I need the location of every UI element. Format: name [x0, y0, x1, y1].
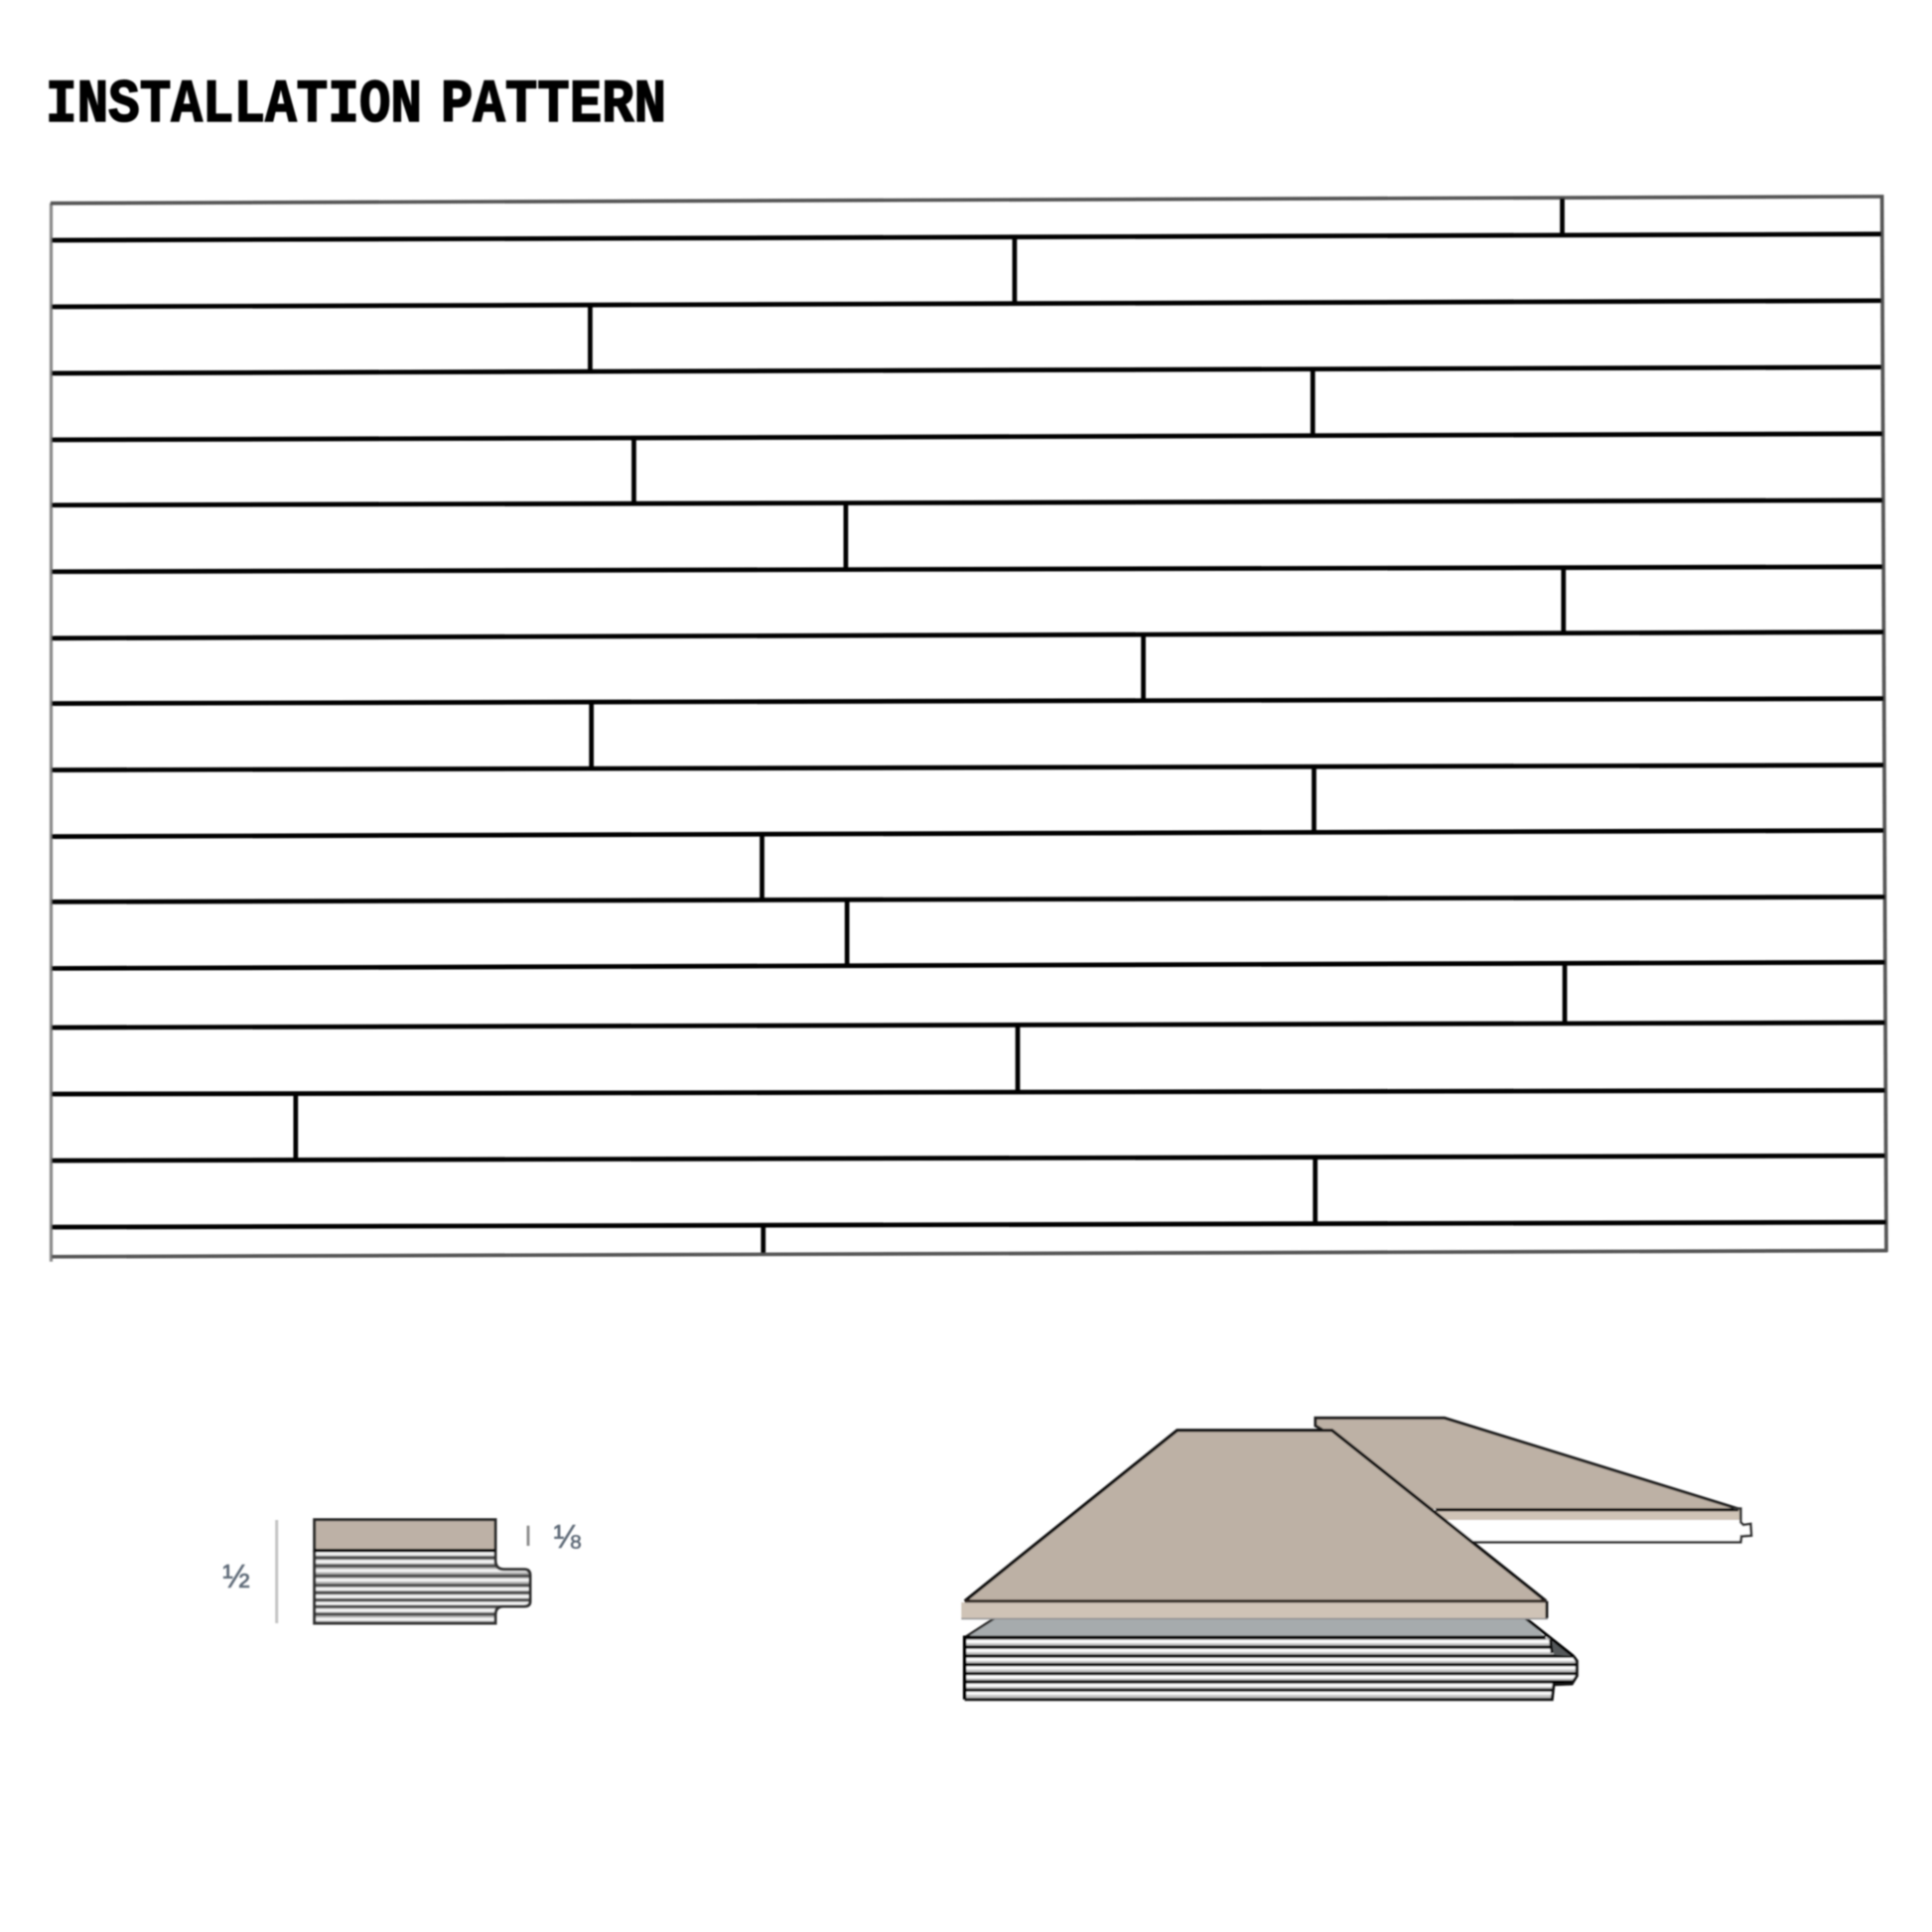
grey underlayer [965, 1618, 1546, 1637]
rear plank [1315, 1418, 1751, 1542]
dimension line: wear layer [527, 1526, 529, 1546]
dimension label: one half: ½ [222, 1558, 250, 1594]
title: INSTALLATION [46, 71, 422, 140]
core with tongue [314, 1551, 532, 1623]
small plank profile with dimensions [222, 1518, 581, 1623]
installation pattern: plank layout [51, 196, 1887, 1262]
horizontal plank joints [52, 234, 1886, 1227]
dimension label: one eighth: ⅛ [553, 1518, 581, 1555]
plank frame [51, 196, 1887, 1262]
title: PATTERN [441, 71, 666, 140]
vertical plank end joints [296, 199, 1565, 1253]
main plank [961, 1431, 1548, 1618]
wear layer [315, 1520, 495, 1551]
lower core stack [963, 1618, 1579, 1700]
dark corner triangle [1552, 1641, 1574, 1656]
dimension line: total thickness [275, 1520, 278, 1623]
large plank perspective illustration [961, 1418, 1751, 1700]
